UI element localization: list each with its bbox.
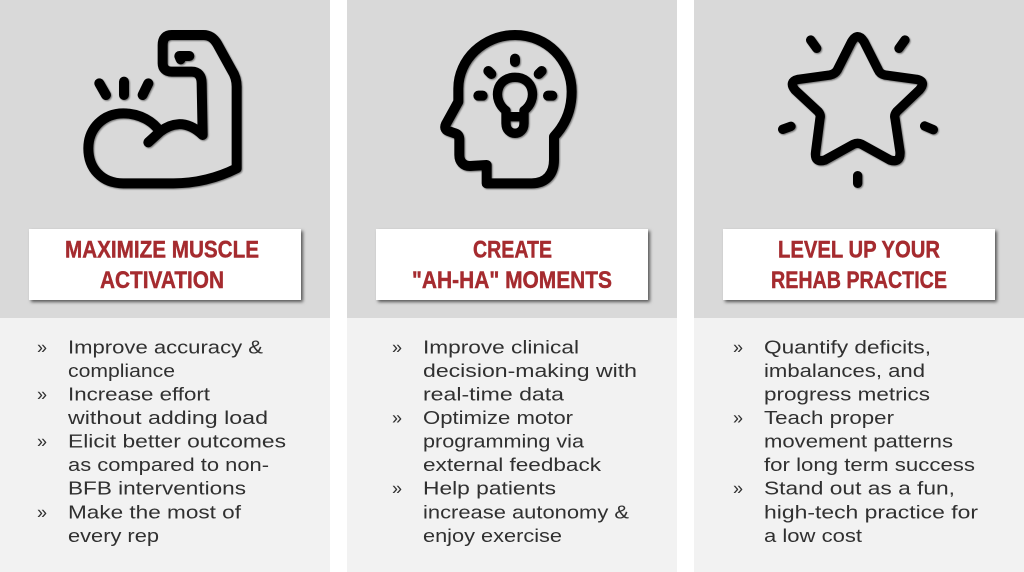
- panel top background: [694, 0, 1024, 318]
- bullet list: Improve clinical: [423, 337, 579, 357]
- bullet list: »: [733, 408, 743, 428]
- bullet list: Make the most of: [68, 502, 242, 522]
- bullet list: »: [733, 479, 743, 499]
- bullet list: »: [733, 337, 743, 357]
- bullet list: compliance: [68, 361, 175, 381]
- bullet list: programming via: [423, 432, 585, 452]
- panel bottom background: [347, 318, 677, 572]
- bullet list: without adding load: [67, 408, 268, 428]
- heading card: [29, 229, 301, 300]
- heading card: "AH-HA" MOMENTS: [412, 267, 612, 294]
- panel bottom background: [0, 318, 330, 572]
- icon: head with light bulb: [445, 35, 572, 183]
- bullet list: [733, 337, 978, 546]
- bullet list: Increase effort: [68, 384, 210, 404]
- bullet list: [37, 337, 286, 546]
- bullet list: decision-making with: [423, 361, 637, 381]
- bullet list: for long term success: [764, 455, 975, 475]
- bullet list: »: [37, 384, 47, 404]
- bullet list: »: [392, 408, 402, 428]
- bullet list: Help patients: [423, 479, 556, 499]
- bullet list: BFB interventions: [68, 479, 246, 499]
- heading card: LEVEL UP YOUR: [778, 236, 940, 264]
- heading card: ACTIVATION: [100, 267, 224, 294]
- panel top background: [347, 0, 677, 318]
- bullet list: progress metrics: [764, 384, 930, 404]
- bullet list: Elicit better outcomes: [68, 432, 286, 452]
- bullet list: »: [37, 432, 47, 452]
- bullet list: »: [392, 337, 402, 357]
- heading card: MAXIMIZE MUSCLE: [65, 236, 259, 264]
- bullet list: real-time data: [423, 384, 565, 404]
- bullet list: high-tech practice for: [764, 502, 978, 522]
- bullet list: every rep: [68, 526, 159, 546]
- icon: flexed muscle arm: [88, 35, 237, 183]
- bullet list: enjoy exercise: [423, 526, 562, 546]
- bullet list: a low cost: [764, 526, 862, 546]
- bullet list: »: [392, 479, 402, 499]
- heading card: CREATE: [473, 236, 552, 264]
- bullet list: movement patterns: [764, 432, 953, 452]
- panel bottom background: [694, 318, 1024, 572]
- bullet list: imbalances, and: [764, 361, 925, 381]
- panel: create ah-ha moments: [347, 0, 677, 572]
- bullet list: [392, 337, 637, 546]
- panel: level up your rehab practice: [694, 0, 1024, 572]
- bullet list: external feedback: [423, 455, 602, 475]
- bullet list: Quantify deficits,: [764, 337, 931, 357]
- heading card: [723, 229, 995, 300]
- heading card: REHAB PRACTICE: [771, 267, 947, 294]
- heading card: [376, 229, 648, 300]
- bullet list: Optimize motor: [423, 408, 573, 428]
- bullet list: increase autonomy &: [423, 502, 629, 522]
- bullet list: Improve accuracy &: [68, 337, 263, 357]
- panel top background: [0, 0, 330, 318]
- bullet list: »: [37, 502, 47, 522]
- bullet list: as compared to non-: [68, 455, 269, 475]
- icon: star with sparkles: [783, 37, 933, 183]
- bullet list: Teach proper: [764, 408, 894, 428]
- bullet list: »: [37, 337, 47, 357]
- panel: maximize muscle activation: [0, 0, 330, 572]
- bullet list: Stand out as a fun,: [764, 479, 955, 499]
